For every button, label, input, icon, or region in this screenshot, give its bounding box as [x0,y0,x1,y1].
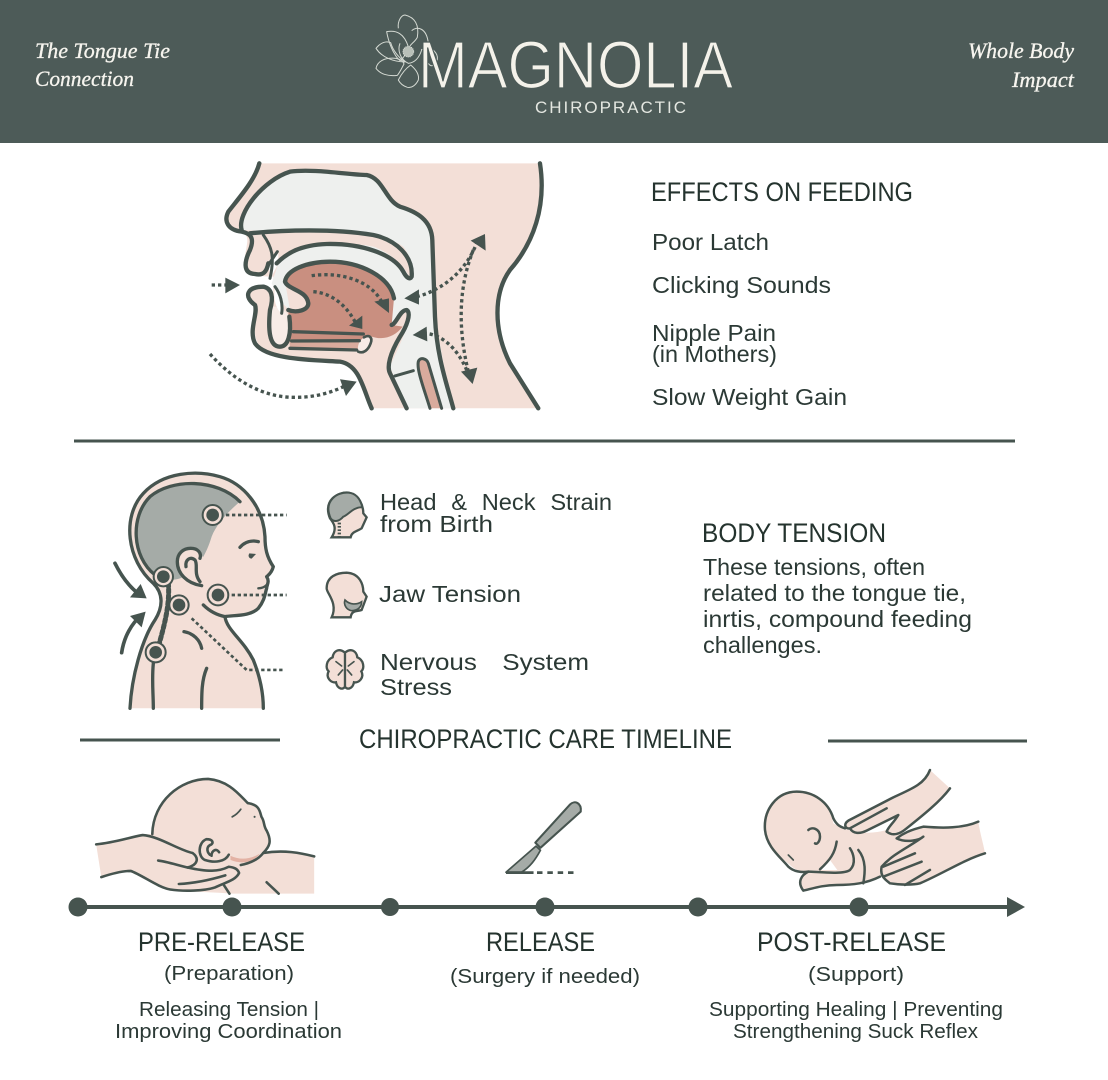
icon: brain [327,650,363,689]
logo wordmark: MAGNOLIA [418,28,733,103]
header band [0,0,1108,143]
feeding effects list [652,229,847,410]
header left tagline: The Tongue Tie [35,38,170,63]
timeline stage: release: RELEASE [486,927,595,957]
feeding effects list: Clicking Sounds [652,272,831,298]
feeding effects list: (in Mothers) [652,341,777,367]
timeline stage: pre-release: Releasing Tension | [139,999,319,1021]
heading: effects on feeding: EFFECTS ON FEEDING [651,177,913,207]
header right tagline: Whole Body [968,38,1074,63]
tension labels [379,489,612,700]
airflow arrows [210,243,477,397]
feeding effects list: Slow Weight Gain [652,384,847,410]
logo subtitle: CHIROPRACTIC [535,98,686,117]
timeline axis with markers [68,897,1025,917]
tension labels: Head & Neck Strain [380,489,612,515]
header left tagline [35,38,170,91]
tension labels: Nervous System [380,649,589,675]
timeline stage: post-release [709,927,1003,1043]
tension labels: Jaw Tension [379,581,521,607]
illustration: baby profile with tension points [115,473,287,708]
body tension description: challenges. [703,632,822,658]
icon: jaw tension [327,573,367,617]
heading: chiropractic care timeline: CHIROPRACTIC CARE TIMELINE [359,724,732,754]
icon: scalpel [506,802,581,873]
body tension description: inrtis, compound feeding [703,606,972,632]
icon: magnolia flower [376,15,437,88]
feeding effects list: Poor Latch [652,229,769,255]
timeline stage: release: (Surgery if needed) [450,966,640,988]
illustration: oral anatomy with airflow arrows [210,163,542,408]
timeline stage: pre-release: (Preparation) [164,963,294,985]
timeline stage: post-release: (Support) [808,964,904,986]
timeline stage: pre-release: PRE-RELEASE [138,927,305,957]
timeline stage: post-release: Strengthening Suck Reflex [733,1021,978,1043]
header right tagline [968,38,1075,92]
body tension description: related to the tongue tie, [703,580,966,606]
header right tagline: Impact [1011,67,1075,92]
body tension description [703,554,972,658]
icon: head and neck strain [328,493,367,537]
timeline stage: pre-release [115,927,342,1043]
timeline stage: post-release: Supporting Healing | Preventing [709,999,1003,1021]
tension labels: from Birth [380,511,493,537]
illustration: hands supporting infant [765,770,985,891]
header left tagline: Connection [35,66,134,91]
body tension description: These tensions, often [703,554,925,580]
feeding effects list: Nipple Pain [652,320,776,346]
timeline stage: release [450,927,640,988]
illustration: infant head cradled in hand [96,779,314,894]
tension labels: Stress [380,674,452,700]
timeline stage: post-release: POST-RELEASE [757,927,946,957]
heading: body tension: BODY TENSION [702,518,886,548]
timeline stage: pre-release: Improving Coordination [115,1021,342,1043]
